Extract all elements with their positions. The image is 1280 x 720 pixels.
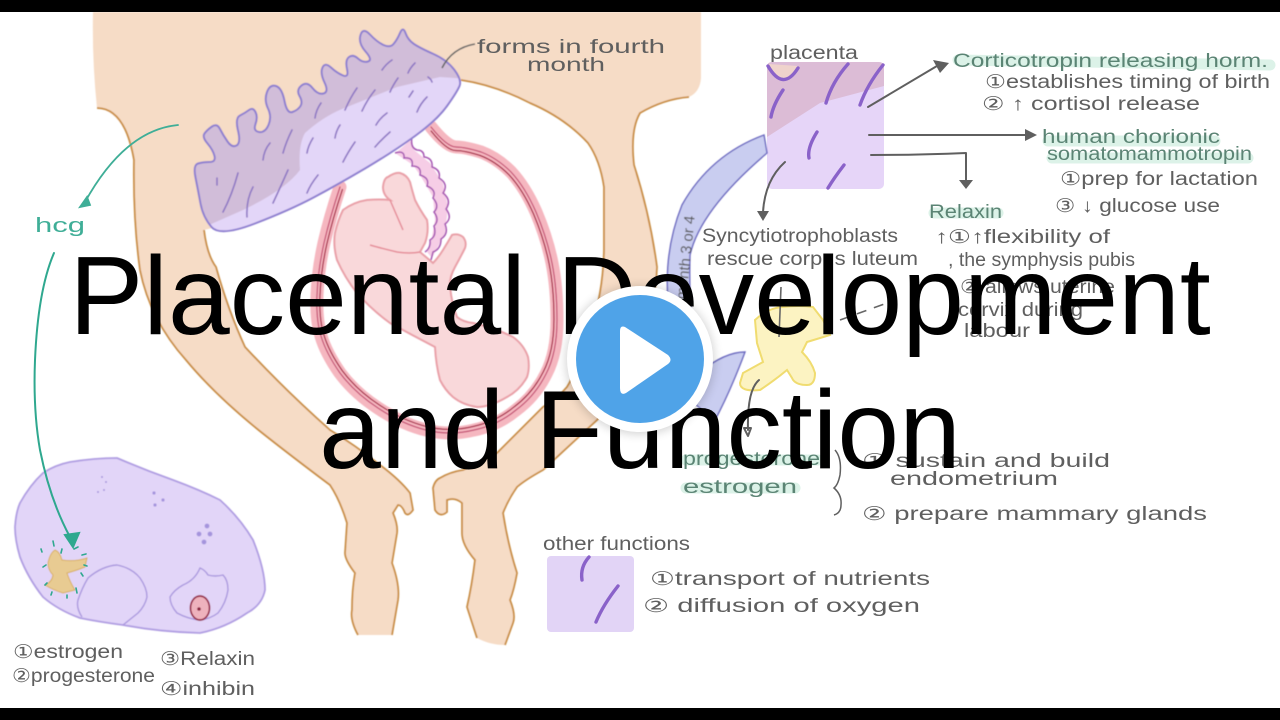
labels: human chorionic somatomammotropin xyxy=(1042,127,1258,217)
panel: other functions: ② diffusion of oxygen xyxy=(643,596,920,617)
title: Placental Development xyxy=(69,234,1211,358)
ovarian follicles xyxy=(78,565,228,625)
uterus and vagina tissue xyxy=(93,12,701,645)
label: other functions: other functions xyxy=(543,534,690,555)
uterine wall xyxy=(317,127,557,433)
labels: relaxin: ② allows uterine xyxy=(960,277,1115,298)
play button xyxy=(566,286,714,434)
labels: progesterone and estrogen xyxy=(683,449,820,498)
label: forms in fourth month xyxy=(477,37,665,76)
panel: other functions xyxy=(543,534,930,632)
labels: progesterone and estrogen functions: ② prepare mammary glands xyxy=(862,504,1207,525)
labels: relaxin: labour xyxy=(964,321,1031,342)
fetus xyxy=(334,173,529,407)
labels: ovarian hormones: ④inhibin xyxy=(160,679,255,700)
panel: placenta close-up xyxy=(767,43,884,189)
brace xyxy=(834,450,841,515)
labels: corticotropin releasing hormone xyxy=(953,51,1270,115)
labels: relaxin: , the symphysis pubis xyxy=(948,250,1135,271)
tissue outline xyxy=(97,80,689,645)
diagram: pregnant uterus anatomy xyxy=(93,10,701,645)
labels: progesterone and estrogen: progesterone xyxy=(683,449,820,470)
square sample xyxy=(547,556,634,632)
function list: ①transport of nutrients xyxy=(650,569,930,590)
labels: human chorionic somatomammotropin: human chorionic xyxy=(1042,127,1220,148)
labels: relaxin xyxy=(929,202,1135,342)
label: placenta: placenta xyxy=(770,43,859,64)
arrow: hcg from placenta xyxy=(80,125,178,207)
small dots xyxy=(97,476,212,544)
labels: syncytiotrophoblasts: rescue corpus luteum xyxy=(707,249,918,270)
labels: syncytiotrophoblasts: Syncytiotrophoblasts xyxy=(702,226,898,247)
arrow: corpus luteum to hormones xyxy=(744,380,759,436)
developing egg xyxy=(190,596,210,620)
title: and Function xyxy=(319,368,961,492)
curved arrow: month 3 or 4 xyxy=(667,135,767,420)
labels: ovarian hormones: ③Relaxin xyxy=(160,649,255,670)
labels: relaxin: ↑①↑flexibility of xyxy=(935,227,1111,248)
curved arrow: month 3 or 4: month 3 or 4 xyxy=(673,215,699,300)
label: forms in fourth month: forms in fourth xyxy=(477,37,665,58)
labels: ovarian hormones xyxy=(12,642,255,700)
labels: relaxin: Relaxin xyxy=(929,202,1002,223)
placenta square xyxy=(767,62,884,189)
labels: progesterone and estrogen functions xyxy=(862,451,1207,525)
labels: corticotropin releasing hormone: ①establishes timing of birth xyxy=(985,72,1270,93)
corpus luteum xyxy=(45,550,87,593)
labels: human chorionic somatomammotropin: ①prep for lactation xyxy=(1060,169,1258,190)
pointer line to corpus luteum xyxy=(779,287,781,337)
label: hcg: hcg xyxy=(35,215,85,237)
placenta xyxy=(193,28,462,233)
ovary with corpus luteum xyxy=(15,458,265,633)
labels: relaxin: cervix during xyxy=(958,300,1083,321)
labels: human chorionic somatomammotropin: ③ ↓ glucose use xyxy=(1055,196,1220,217)
labels: progesterone and estrogen functions: ① sustain and build xyxy=(862,451,1110,472)
labels: human chorionic somatomammotropin: somatomammotropin xyxy=(1047,144,1252,165)
arrow: placenta hormone label line xyxy=(442,44,475,68)
labels: syncytiotrophoblasts xyxy=(702,226,918,270)
labels: progesterone and estrogen functions: endometrium xyxy=(890,469,1058,490)
label: forms in fourth month: month xyxy=(527,55,605,76)
labels: ovarian hormones: ①estrogen xyxy=(13,642,123,663)
title xyxy=(69,234,1211,492)
umbilical cord xyxy=(395,137,449,260)
labels: corticotropin releasing hormone: Corticotropin releasing horm. xyxy=(953,51,1268,72)
labels: corticotropin releasing hormone: ② ↑ cortisol release xyxy=(982,94,1200,115)
dashed pointer to relaxin xyxy=(840,302,890,320)
corpus luteum yellow xyxy=(740,306,830,390)
arrows from placenta xyxy=(757,60,1037,221)
labels: progesterone and estrogen: estrogen xyxy=(683,477,797,498)
arrow: hcg to ovary xyxy=(35,253,87,598)
labels: ovarian hormones: ②progesterone xyxy=(12,666,155,687)
